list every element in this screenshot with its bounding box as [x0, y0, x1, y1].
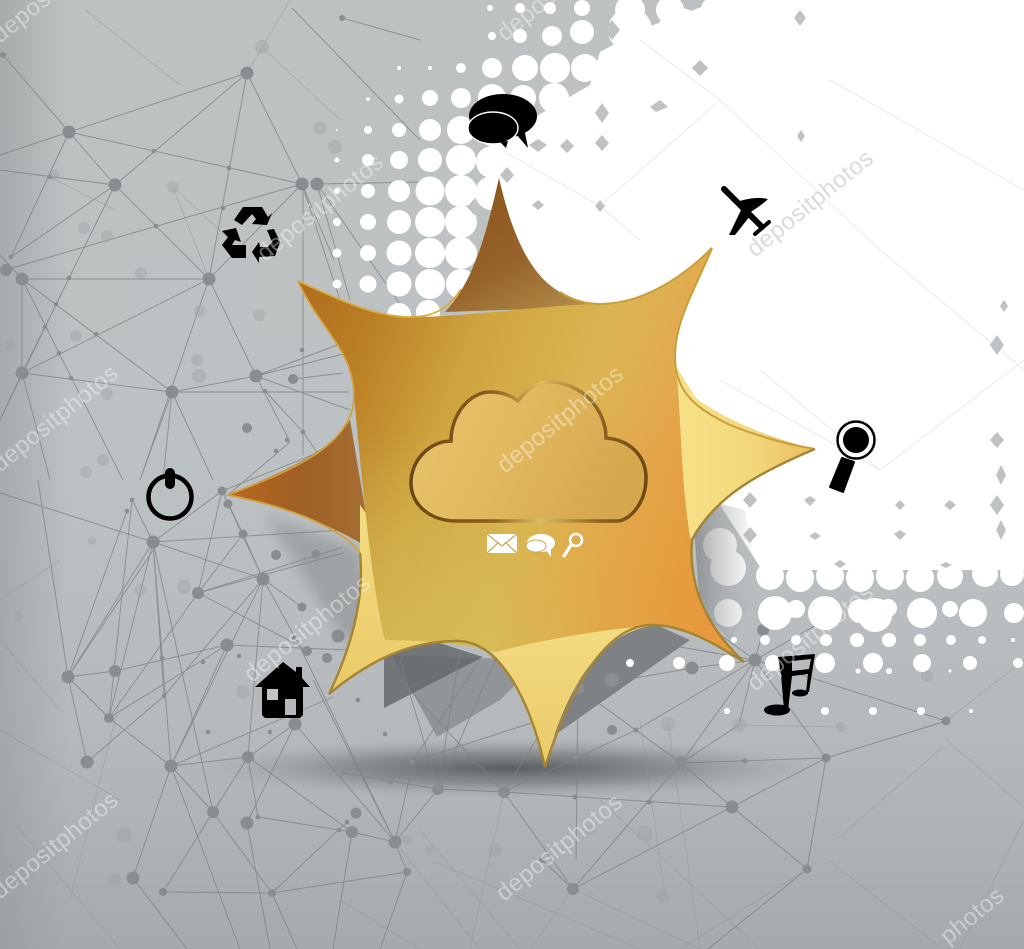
right cast shadow [692, 497, 760, 640]
icon row under cloud [487, 534, 582, 557]
star: main gold body [298, 248, 744, 662]
star: lower-right golden rim [545, 449, 815, 767]
watermarks: depositphotos [742, 578, 879, 697]
shadow: right wedge [552, 622, 690, 737]
star: bottom spike [490, 618, 660, 767]
watermark on white area: depositphotos [742, 144, 879, 263]
star: left golden rim [228, 281, 360, 553]
star: top spike [445, 178, 620, 312]
star: lower-left yellow corner [329, 505, 500, 694]
watermarks: photos [935, 882, 1010, 949]
watermarks: depositphotos [492, 360, 629, 479]
icon: envelope [487, 534, 517, 553]
star: upper-left golden rim [298, 281, 461, 317]
faint lines on white area [507, 40, 1024, 470]
icon: magnifying glass [830, 422, 874, 492]
ground shadow [200, 738, 820, 798]
watermarks: depositphotos [252, 148, 389, 267]
long cast shadows below star [384, 622, 690, 737]
star: left spike [228, 420, 372, 550]
star: lower-left golden rim [329, 553, 545, 767]
icon: house [255, 662, 310, 718]
icon: music notes [764, 654, 815, 716]
star: upper-right golden rim [560, 248, 815, 449]
white halftone area [332, 0, 1024, 715]
icon: power symbol [148, 468, 192, 518]
star: body lower tint [298, 248, 744, 662]
cloud [411, 382, 646, 521]
star: right spike [670, 360, 815, 540]
icon: speech bubbles [468, 94, 537, 148]
icon: small magnifier [564, 534, 582, 556]
icon: recycling arrows [222, 207, 280, 263]
left soft shadow [265, 515, 385, 640]
shadow: left lighter wedge [392, 655, 540, 737]
watermarks: depositphotos [239, 569, 376, 688]
icon: airplane [724, 189, 769, 235]
halftone grey diamonds [438, 10, 1008, 568]
icon: small chat bubbles [526, 534, 555, 557]
background left edge shade [0, 0, 70, 949]
star: body orange glow [495, 357, 744, 662]
shadow: left dark wedge [384, 640, 483, 708]
watermarks: depositphotos [491, 788, 628, 907]
